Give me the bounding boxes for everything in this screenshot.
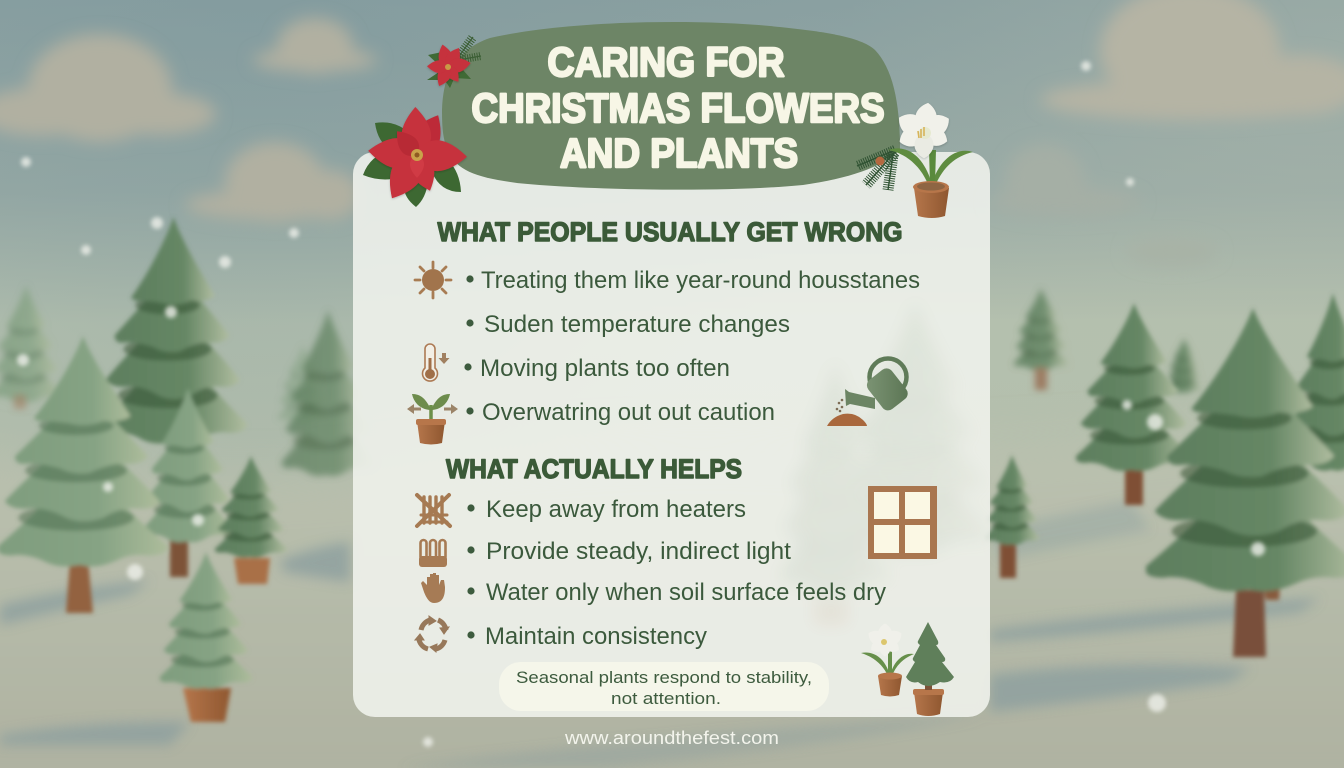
background: mid trees: [0, 217, 1344, 722]
callout: closing note: Seasonal plants respond to stability,: [516, 669, 812, 687]
title text: CHRISTMAS FLOWERS: [472, 85, 884, 131]
flower: [894, 101, 954, 158]
title text: AND PLANTS: [560, 130, 798, 176]
icon: cycle arrows: [415, 616, 449, 652]
background clouds: [0, 0, 1344, 266]
icon: watering can: [827, 358, 911, 426]
icon: potted seedling with arrows: [407, 394, 458, 444]
icon: sun: [415, 262, 451, 298]
list: common mistakes: [464, 267, 920, 426]
title banner: [442, 22, 900, 190]
list: common mistakes: Suden temperature changes: [484, 311, 790, 338]
list: what helps: Keep away from heaters: [486, 496, 746, 523]
icon: small amaryllis and potted tree: [861, 622, 954, 716]
icon: small poinsettia with pine sprig: [427, 37, 481, 89]
heading: what people usually get wrong: WHAT PEOPLE USUALLY GET WRONG: [438, 217, 902, 247]
icon: hand: [421, 573, 445, 603]
list: what helps: [467, 496, 886, 650]
list: what helps: Provide steady, indirect light: [486, 538, 791, 565]
icon: window: [868, 486, 937, 559]
title text: CARING FOR: [548, 39, 784, 85]
callout: closing note: [499, 662, 829, 711]
leaves and stem: [888, 148, 973, 184]
footer: website: www.aroundthefest.com: [564, 728, 779, 748]
callout: closing note: not attention.: [611, 690, 721, 708]
icon: large poinsettia: [363, 107, 468, 207]
list: common mistakes: Moving plants too often: [480, 355, 730, 382]
list: common mistakes: Overwatring out out caution: [482, 399, 775, 426]
list: common mistakes: Treating them like year-round housstanes: [481, 267, 920, 294]
pot: [913, 181, 949, 218]
background: ground shadows: [0, 500, 1320, 768]
icon: white amaryllis in pot with pine sprig: [857, 101, 973, 218]
title text: [472, 39, 884, 176]
panel: main card: [353, 152, 990, 717]
background: far trees: [0, 285, 1201, 476]
icon: radiator: [419, 540, 447, 567]
heading: what actually helps: WHAT ACTUALLY HELPS: [446, 454, 742, 484]
icon: crossed-out heater: [417, 495, 450, 526]
list: what helps: Maintain consistency: [485, 623, 707, 650]
pine sprig: [857, 150, 895, 190]
icon: thermometer with down arrow: [423, 344, 450, 381]
list: what helps: Water only when soil surface feels dry: [486, 579, 886, 606]
